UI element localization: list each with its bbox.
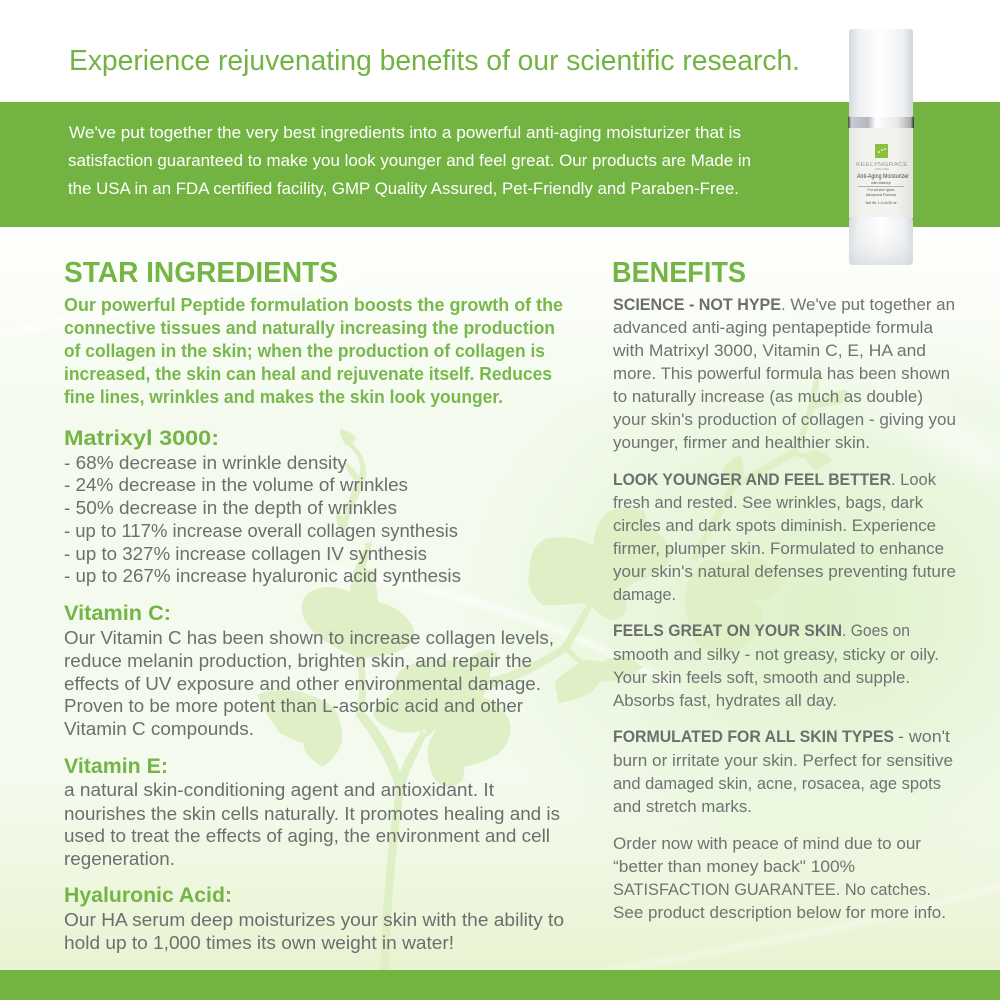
- panel: benefits: [612, 257, 956, 922]
- label text: SKIN CARE: [875, 167, 889, 171]
- text block: feels great: [613, 622, 939, 710]
- text block: look younger: damage.: [613, 586, 676, 604]
- text block: science not hype: to naturally increase (as much as double): [613, 388, 923, 406]
- text block: Vitamin C: Proven to be more potent than L-asorbic acid and other: [64, 695, 523, 716]
- right branch: [488, 604, 592, 688]
- label text: Advanced Formula: [866, 193, 896, 197]
- text block: all skin types: FORMULATED FOR ALL SKIN TYPES: [613, 728, 894, 746]
- text block: all skin types: and damaged skin, acne, rosacea, age spots: [613, 775, 941, 793]
- icon: brand logo: [875, 144, 888, 158]
- panel: star ingredients: [64, 257, 564, 953]
- upper-left flower: [302, 570, 414, 658]
- text block: Matrixyl list: - up to 327% increase collagen IV synthesis: [64, 543, 427, 564]
- text block: feels great: Absorbs fast, hydrates all day.: [613, 692, 837, 710]
- text block: look younger: your skin's natural defenses preventing future: [613, 563, 956, 581]
- text block: look younger: LOOK YOUNGER AND FEEL BETTER: [613, 471, 891, 489]
- second right flower: [685, 558, 785, 655]
- text block: Matrixyl list: - 24% decrease in the volume of wrinkles: [64, 474, 408, 495]
- text block: science not hype: advanced anti-aging pentapeptide formula: [613, 319, 934, 337]
- intro text block: satisfaction guaranteed to make you look younger and feel great. Our products are Made in: [68, 152, 751, 170]
- intro text block: the USA in an FDA certified facility, GMP Quality Assured, Pet-Friendly and Paraben-Free.: [68, 180, 739, 198]
- text block: feels great: FEELS GREAT ON YOUR SKIN: [613, 622, 842, 640]
- text block: science not hype: more. This powerful formula has been shown: [613, 365, 950, 383]
- text block: feels great: smooth and silky - not greasy, sticky or oily.: [613, 646, 939, 664]
- text block: Vitamin E: [64, 779, 560, 869]
- middle flower: [373, 650, 511, 787]
- text block: guarantee: See product description below for more info.: [613, 904, 946, 922]
- bottom green band: [0, 970, 1000, 1000]
- text block: all skin types: and stretch marks.: [613, 798, 752, 816]
- text block: Matrixyl list: - 68% decrease in wrinkle density: [64, 452, 348, 473]
- label text: KEELYNGRACE: [856, 162, 909, 168]
- text block: look younger: firmer, plumper skin. Formulated to enhance: [613, 540, 944, 558]
- heading: Hyaluronic Acid: Hyaluronic Acid:: [64, 883, 232, 907]
- text block: Vitamin E: used to treat the effects of aging, the environment and cell: [64, 825, 550, 846]
- text block: Vitamin C: [64, 627, 554, 739]
- text block: feels great: Your skin feels soft, smooth and supple.: [613, 669, 910, 687]
- text block: Vitamin E: regeneration.: [64, 848, 175, 869]
- text block: look younger: [613, 471, 956, 604]
- text block: all skin types: [613, 728, 953, 816]
- text block: Matrixyl list: - 50% decrease in the depth of wrinkles: [64, 497, 397, 518]
- text block: peptide formulation: of collagen in the skin; when the production of collagen is: [64, 341, 545, 361]
- text block: look younger: circles and dark spots diminish. Experience: [613, 517, 936, 535]
- text block: peptide formulation: fine lines, wrinkles and makes the skin look younger.: [64, 387, 503, 407]
- text block: guarantee: Order now with peace of mind due to our: [613, 835, 922, 853]
- text block: science not hype: your skin's production of collagen - giving you: [613, 411, 956, 429]
- heading: Vitamin C: Vitamin C:: [64, 601, 171, 625]
- text block: Hyaluronic Acid: hold up to 1,000 times its own weight in water!: [64, 932, 454, 953]
- title: Experience rejuvenating benefits of our scientific research.: [69, 45, 800, 77]
- lower-left flower: [257, 690, 342, 767]
- illustration: orchid watermark: [257, 376, 847, 972]
- text block: Vitamin E: a natural skin-conditioning agent and antioxidant. It: [64, 779, 494, 800]
- text block: Matrixyl list: - up to 117% increase overall collagen synthesis: [64, 520, 458, 541]
- label text: with Matrixyl: [871, 181, 891, 185]
- far right leaves: [722, 455, 744, 488]
- text block: science not hype: younger, firmer and healthier skin.: [613, 434, 870, 452]
- label text: [856, 162, 909, 205]
- text block: guarantee: “better than money back" 100%: [613, 858, 855, 876]
- text block: peptide formulation: increased, the skin can heal and rejuvenate itself. Reduces: [64, 364, 552, 384]
- text block: Matrixyl list: [64, 452, 461, 586]
- intro text block: [68, 124, 751, 198]
- heading: benefits: BENEFITS: [612, 257, 746, 289]
- label text: Anti-Aging Moisturizer: [857, 174, 909, 180]
- text block: feels great: . Goes on: [842, 622, 910, 640]
- text block: science not hype: . We've put together an: [781, 296, 955, 314]
- text block: Vitamin E: nourishes the skin cells naturally. It promotes healing and is: [64, 803, 560, 824]
- text block: Vitamin C: effects of UV exposure and other environmental damage.: [64, 673, 541, 694]
- text block: science not hype: with Matrixyl 3000, Vitamin C, E, HA and: [612, 342, 926, 360]
- text block: all skin types: - won't: [898, 728, 950, 746]
- label text: For all skin types: [868, 188, 895, 192]
- text block: peptide formulation: connective tissues and naturally increasing the production: [64, 318, 555, 338]
- text block: Hyaluronic Acid: Our HA serum deep moisturizes your skin with the ability to: [64, 909, 564, 930]
- right flower: [528, 507, 673, 620]
- text block: guarantee: SATISFACTION GUARANTEE. No catches.: [613, 881, 931, 899]
- intro text block: We've put together the very best ingredients into a powerful anti-aging moisturizer that is: [69, 124, 741, 142]
- top green band: [0, 102, 1000, 227]
- upper stem with buds: [350, 542, 372, 592]
- label text: Net Wt. 1.0 oz/30 ml: [866, 201, 897, 205]
- heading: Matrixyl 3000: Matrixyl 3000:: [64, 426, 219, 450]
- text block: science not hype: [612, 296, 956, 452]
- text block: all skin types: burn or irritate your skin. Perfect for sensitive: [613, 752, 953, 770]
- text block: look younger: . Look: [891, 471, 937, 489]
- text block: peptide formulation: Our powerful Peptide formulation boosts the growth of the: [64, 295, 563, 315]
- decorative swoosh: [0, 280, 1000, 980]
- text block: look younger: fresh and rested. See wrinkles, bags, dark: [613, 494, 924, 512]
- text block: Vitamin C: Vitamin C compounds.: [64, 718, 254, 739]
- heading: Vitamin E: Vitamin E:: [64, 754, 168, 778]
- heading: star ingredients: STAR INGREDIENTS: [64, 257, 338, 289]
- text block: Matrixyl list: - up to 267% increase hyaluronic acid synthesis: [64, 565, 461, 586]
- text block: Vitamin C: reduce melanin production, brighten skin, and repair the: [64, 650, 532, 671]
- text block: science not hype: SCIENCE - NOT HYPE: [613, 296, 781, 314]
- main stem: [354, 650, 427, 972]
- lower bud: [555, 655, 643, 703]
- text block: Vitamin C: Our Vitamin C has been shown to increase collagen levels,: [64, 627, 554, 648]
- text block: Hyaluronic Acid: [64, 909, 564, 953]
- text block: peptide formulation: [64, 295, 563, 407]
- icon: product bottle: [848, 29, 914, 265]
- far right stem: [690, 376, 820, 562]
- text block: guarantee: [613, 835, 946, 922]
